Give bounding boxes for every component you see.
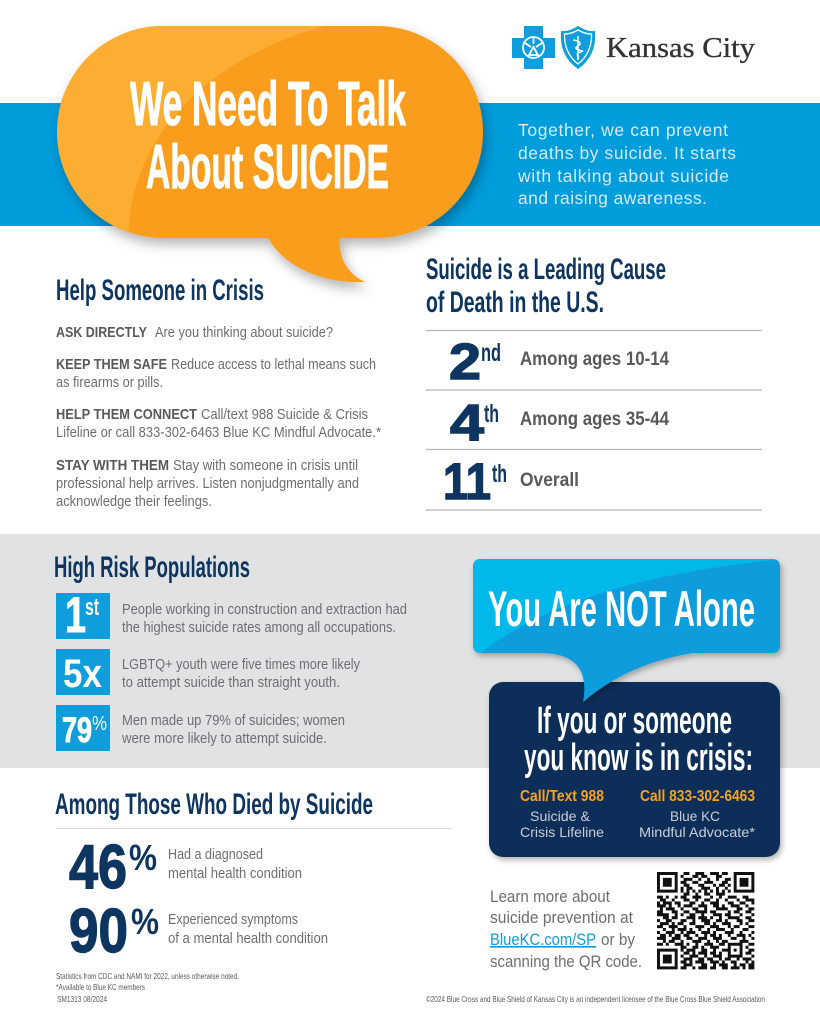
rank: 4th among ages 35-44: Among ages 35-44 <box>520 409 669 430</box>
text block: learn more <box>490 888 642 971</box>
text block: learn more: suicide prevention at <box>490 909 633 927</box>
contact: call or text 988 <box>520 788 604 840</box>
heading: leading cause of death: of Death in the U.S. <box>426 286 604 319</box>
stat: 46%: % <box>129 837 157 878</box>
text block: learn more: Learn more about <box>490 888 610 906</box>
rank: 4th among ages 35-44: th <box>484 400 499 428</box>
tip: stay with them: acknowledge their feelings. <box>56 493 212 510</box>
tip: stay with them <box>56 457 359 510</box>
tip: stay with them: professional help arrives. Listen nonjudgmentally and <box>56 475 359 492</box>
stat: 79%: % <box>92 713 107 735</box>
contact: call or text 988: Call/Text 988 <box>520 788 604 805</box>
logo: Blue KC <box>512 26 755 69</box>
stat: 1st: People working in construction and extraction had <box>122 601 407 618</box>
title: We Need To Talk <box>130 70 406 139</box>
stat: 1st: st <box>85 594 99 621</box>
rank: 4th among ages 35-44 <box>450 394 669 451</box>
stat: 90% <box>69 897 328 966</box>
text block: learn more: or by <box>601 931 636 949</box>
rank: 2nd among ages 10-14: Among ages 10-14 <box>520 349 669 370</box>
stat: 79% <box>56 705 345 751</box>
contact: call Blue KC mindful advocate: Blue KC <box>670 808 720 824</box>
panel: among those who died by suicide <box>55 788 452 966</box>
icon: blue shield <box>561 26 595 69</box>
stat: 79%: were more likely to attempt suicide. <box>121 730 327 747</box>
header intro text: deaths by suicide. It starts <box>518 143 736 163</box>
header intro text: and raising awareness. <box>518 188 707 208</box>
tip: ask directly: ASK DIRECTLY <box>56 324 147 341</box>
contact: call or text 988: Suicide & <box>530 808 591 824</box>
contact: call Blue KC mindful advocate <box>639 788 756 840</box>
icon: QR code <box>657 873 754 968</box>
tip: ask directly: Are you thinking about suicide? <box>155 324 333 341</box>
tip: keep them safe: as firearms or pills. <box>56 374 163 391</box>
rank: 2nd among ages 10-14: 2 <box>449 333 481 390</box>
footnotes: Statistics from CDC and NAMI for 2022, unless otherwise noted. <box>56 971 239 981</box>
stat: 1st <box>56 587 407 643</box>
heading: high risk populations: High Risk Populations <box>54 551 250 584</box>
tip: help them connect: Call/text 988 Suicide & Crisis <box>201 406 368 423</box>
rank: 4th among ages 35-44: 4 <box>450 394 485 451</box>
rank: 11th overall: th <box>492 460 507 488</box>
title: About SUICIDE <box>146 133 389 202</box>
tip: ask directly <box>56 324 333 341</box>
rank: 11th overall <box>443 453 579 510</box>
tip: help them connect: Lifeline or call 833-302-6463 Blue KC Mindful Advocate.* <box>56 424 381 441</box>
stat: 1st: 1 <box>65 587 86 643</box>
stat: 90%: Experienced symptoms <box>168 911 298 928</box>
rank: 2nd among ages 10-14 <box>449 333 669 390</box>
text block: learn more: BlueKC.com/SP <box>490 931 596 949</box>
rank: 2nd among ages 10-14: nd <box>481 339 501 367</box>
tip: keep them safe: KEEP THEM SAFE <box>56 356 167 373</box>
gray band: high risk populations background <box>0 534 820 768</box>
footnotes <box>56 971 239 1004</box>
header intro text: Together, we can prevent <box>518 120 728 140</box>
callout: you are not alone bubble <box>465 550 785 702</box>
rank: 11th overall: Overall <box>520 470 579 491</box>
tip: stay with them: Stay with someone in crisis until <box>173 457 358 474</box>
panel: help someone in crisis <box>56 274 381 510</box>
stat: 90%: % <box>131 901 159 942</box>
icon: blue cross <box>512 26 555 69</box>
contact: call or text 988: Crisis Lifeline <box>520 824 604 840</box>
stat: 5x: to attempt suicide than straight youth. <box>122 674 340 691</box>
stat: 46%: 46 <box>69 833 127 902</box>
stat: 46%: mental health condition <box>168 865 302 882</box>
header speech bubble <box>40 20 483 282</box>
text block: learn more: scanning the QR code. <box>490 953 642 971</box>
stat: 5x: LGBTQ+ youth were five times more likely <box>122 656 360 673</box>
tip: help them connect: HELP THEM CONNECT <box>56 406 197 423</box>
stat: 90%: of a mental health condition <box>168 930 328 947</box>
logo wordmark: Kansas City <box>606 33 755 64</box>
stat: 5x: 5x <box>63 652 102 696</box>
stat: 46% <box>69 833 302 902</box>
panel: leading cause of death <box>426 253 762 510</box>
stat: 46%: Had a diagnosed <box>168 846 263 863</box>
header intro text: with talking about suicide <box>517 166 729 186</box>
stat: 90%: 90 <box>69 897 128 966</box>
heading: leading cause of death: Suicide is a Leading Cause <box>426 253 666 286</box>
heading: among those who died: Among Those Who Died by Suicide <box>55 788 373 821</box>
contact: call Blue KC mindful advocate: Mindful Advocate* <box>639 824 756 840</box>
tip: keep them safe <box>56 356 376 391</box>
footnotes: SM1313 08/2024 <box>57 994 107 1004</box>
title <box>130 70 406 202</box>
stat: 5x <box>56 649 360 696</box>
tip: help them connect <box>56 406 381 441</box>
heading: leading cause of death <box>426 253 666 319</box>
stat: 79%: 79 <box>62 711 92 750</box>
rank: 11th overall: 11 <box>443 453 491 510</box>
stat: 1st: the highest suicide rates among all occupations. <box>122 619 396 636</box>
stat: 79%: Men made up 79% of suicides; women <box>122 712 345 729</box>
heading: help someone in crisis: Help Someone in Crisis <box>56 274 264 307</box>
footnotes: *Available to Blue KC members <box>56 982 145 992</box>
panel: crisis contacts <box>489 682 780 857</box>
header blue band <box>0 103 820 226</box>
tip: stay with them: STAY WITH THEM <box>56 457 169 474</box>
heading: if you or someone <box>524 700 753 779</box>
header intro text <box>517 120 736 208</box>
contact: call Blue KC mindful advocate: Call 833-302-6463 <box>640 788 755 805</box>
panel: high risk populations <box>54 551 407 751</box>
tip: keep them safe: Reduce access to lethal means such <box>171 356 376 373</box>
